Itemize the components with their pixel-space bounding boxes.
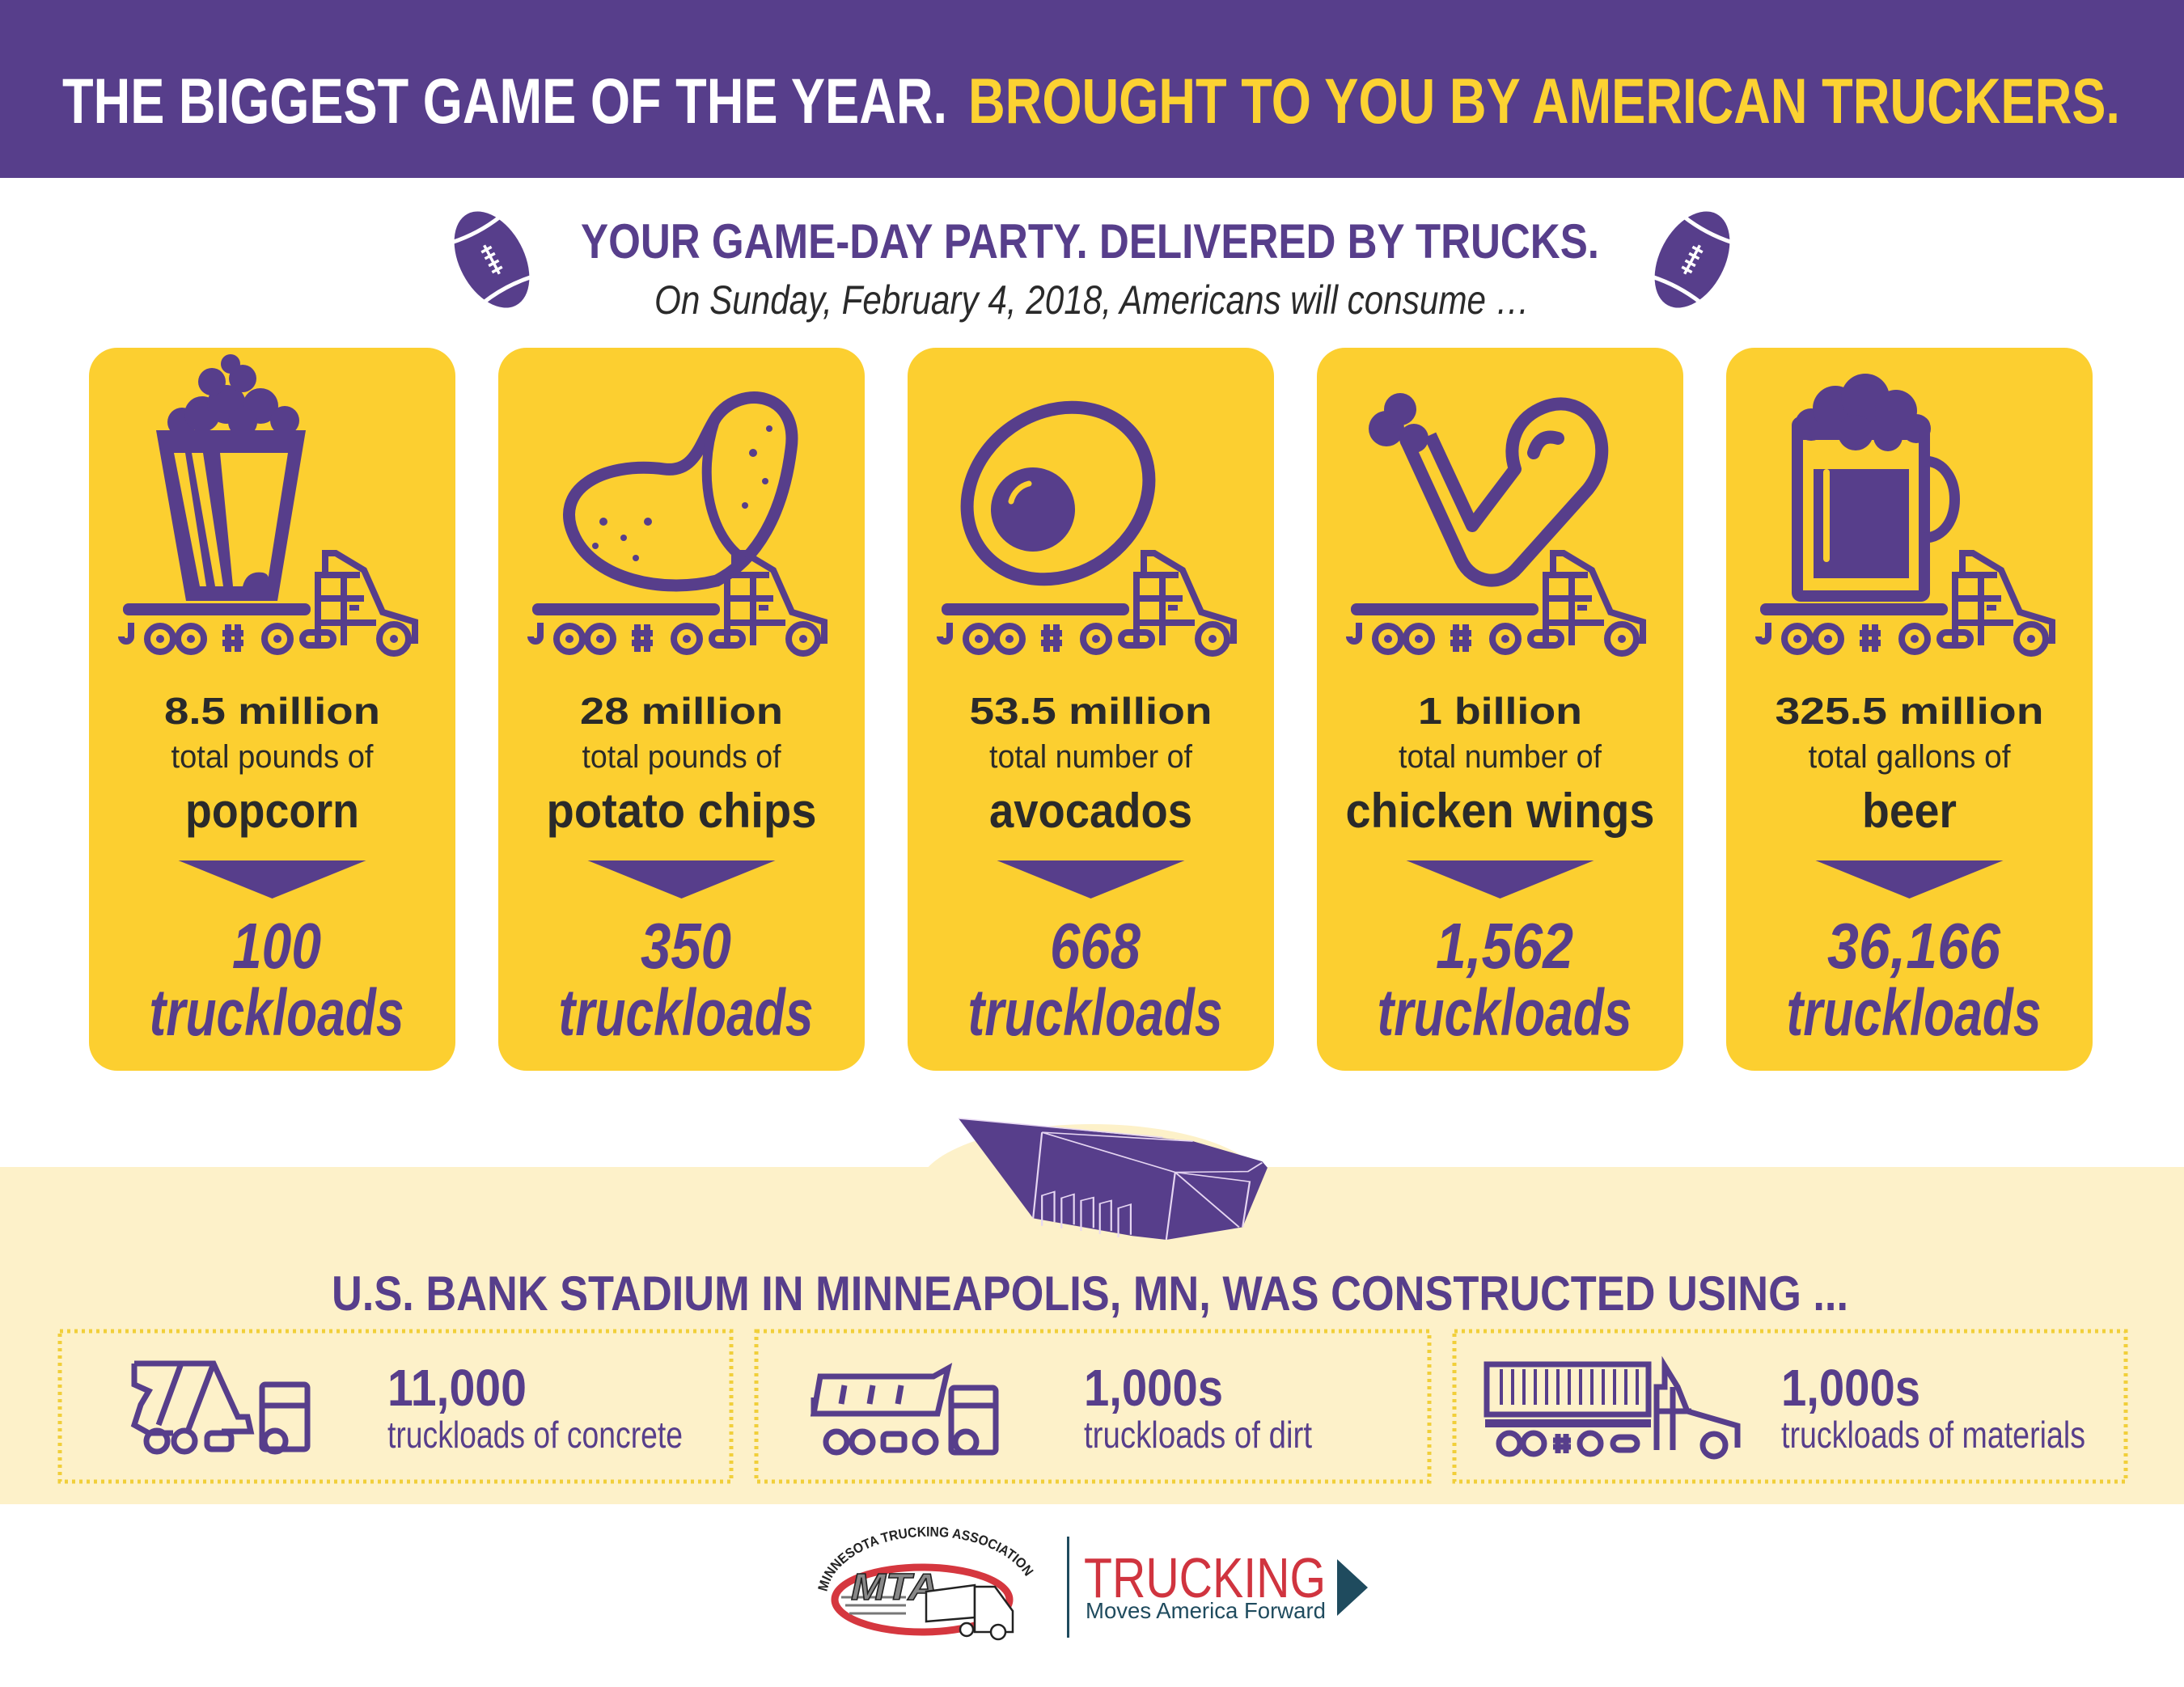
icon: container truck (1485, 1364, 1737, 1457)
icon: football right (1640, 199, 1745, 320)
stat text: 28 million (580, 690, 783, 732)
stat text: 53.5 million (969, 690, 1212, 732)
box: concrete (60, 1331, 731, 1482)
stat text (1346, 690, 1655, 1050)
box: concrete: truckloads of concrete (387, 1414, 683, 1456)
logo: MTA: MINNESOTA TRUCKING ASSOCIATION (818, 1527, 1034, 1592)
box: dirt: truckloads of dirt (1084, 1414, 1312, 1456)
icon: chip truck (531, 398, 824, 653)
stat text: 1 billion (1418, 690, 1582, 732)
logo: Trucking Moves America Forward: TRUCKING (1084, 1546, 1326, 1609)
stat text: total pounds of (171, 739, 374, 775)
stat: materials: 1,000s (1781, 1359, 1920, 1417)
logo: Trucking Moves America Forward: Moves America Forward (1086, 1598, 1326, 1623)
stat text: potato chips (547, 784, 817, 838)
logo: MTA: MTA (851, 1566, 938, 1608)
panel: popcorn (89, 348, 455, 1071)
stat text: total number of (989, 739, 1193, 775)
panel: stadium section (0, 1118, 2184, 1504)
title: THE BIGGEST GAME OF THE YEAR. (62, 65, 947, 137)
box: dirt (756, 1331, 1429, 1482)
stat text: 100 (232, 910, 321, 982)
stat text: 8.5 million (164, 690, 380, 732)
panel: chicken wings (1317, 348, 1683, 1071)
stat text: total gallons of (1809, 739, 2011, 775)
stat text: truckloads (149, 976, 404, 1050)
box: materials: truckloads of materials (1781, 1414, 2085, 1456)
divider (1067, 1537, 1069, 1638)
logo: MTA (818, 1527, 1034, 1640)
stat text (1775, 690, 2043, 1050)
panel: potato chips (498, 348, 865, 1071)
icon: football left (439, 199, 544, 320)
stadium heading: U.S. BANK STADIUM IN MINNEAPOLIS, MN, WAS CONSTRUCTED USING ... (332, 1266, 1848, 1321)
icon: dump truck (814, 1368, 996, 1452)
header banner (0, 0, 2184, 178)
stat text: truckloads (967, 976, 1223, 1050)
icon: concrete mixer truck (134, 1364, 307, 1452)
stat text: 668 (1050, 910, 1141, 982)
stat text: 36,166 (1827, 910, 2000, 982)
panel: avocados (908, 348, 1274, 1071)
stat text: popcorn (185, 784, 359, 838)
stat text: truckloads (1377, 976, 1632, 1050)
stat: 11,000: 11,000 (387, 1359, 527, 1417)
stat text: 1,562 (1436, 910, 1573, 982)
panel: beer (1726, 348, 2093, 1071)
stat text: total number of (1399, 739, 1602, 775)
stat text (547, 690, 817, 1050)
stat text (967, 690, 1223, 1050)
subtitle heading: YOUR GAME-DAY PARTY. DELIVERED BY TRUCKS. (581, 214, 1599, 268)
stat text (149, 690, 404, 1050)
icon: chicken wing truck (1349, 393, 1643, 653)
stat text: chicken wings (1346, 784, 1655, 838)
icon: beer mug truck (1759, 374, 2052, 653)
stat text: beer (1862, 784, 1957, 838)
stat text: truckloads (558, 976, 814, 1050)
stat text: total pounds of (582, 739, 781, 775)
icon: avocado truck (933, 372, 1234, 653)
stat text: truckloads (1786, 976, 2042, 1050)
stat text: avocados (989, 784, 1192, 838)
icon: popcorn truck (121, 354, 415, 653)
stat text: 350 (641, 910, 731, 982)
stat: dirt: 1,000s (1084, 1359, 1223, 1417)
intro line: On Sunday, February 4, 2018, Americans will consume … (654, 277, 1530, 323)
icon: stadium (959, 1118, 1268, 1240)
stat text: 325.5 million (1775, 690, 2043, 732)
box: materials (1454, 1331, 2126, 1482)
